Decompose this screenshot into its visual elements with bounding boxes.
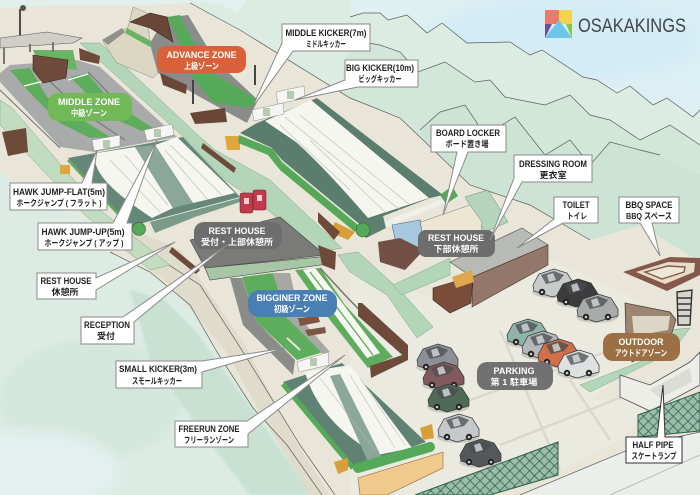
zone label: upper rest house: REST HOUSE [208,226,266,237]
parked cars [416,269,618,468]
bigginer ramp [230,268,398,375]
hawk jump landing [60,137,240,236]
brown fences between ramps [169,143,340,274]
callout: rest house: REST HOUSE [40,276,92,286]
callout: bbq space [619,197,679,256]
zone label: lower rest house [418,230,495,257]
callout: toilet: トイレ [567,211,587,221]
callout: half pipe: スケートランプ [632,451,677,461]
zone label: parking: 第 1 駐車場 [490,377,538,387]
green walkways [0,43,690,392]
callout: half pipe [626,385,682,463]
zone label: advance zone: 上級ゾーン [184,61,219,71]
zone label: advance zone: ADVANCE ZONE [166,50,236,61]
callout: half pipe: HALF PIPE [632,440,674,450]
callout: rest house: 休憩所 [52,287,79,297]
logo icon: coloured square [545,10,572,38]
half pipe ramp [620,352,700,411]
callout: bbq space: BBQ スペース [626,211,672,221]
callout: freerun zone [175,355,345,447]
zone label: bigginer zone: BIGGINER ZONE [256,293,328,304]
stairs [677,290,692,325]
callout: middle kicker: ミドルキッカー [306,39,346,49]
green chain link fences [415,392,700,495]
callout: dressing room: DRESSING ROOM [519,159,587,169]
callout: reception [81,245,227,344]
fence at beginner area [358,303,408,378]
zone label: bigginer zone [248,290,337,317]
zone label: lower rest house: REST HOUSE [428,233,484,244]
callout: board locker: BOARD LOCKER [436,128,500,138]
bbq space deck [623,257,700,291]
big kicker landing [238,98,445,240]
zone label: middle zone [48,93,132,121]
zone label: outdoor: アウトドアゾーン [615,348,667,358]
callout: bbq space: BBQ SPACE [626,200,672,210]
callout: reception: 受付 [97,331,116,341]
callout: dressing room [490,155,592,240]
callout: freerun zone: フリーランゾーン [184,435,234,445]
zone label: outdoor: OUTDOOR [618,337,664,348]
callout: hawk jump up: HAWK JUMP-UP(5m) [42,227,124,237]
zone label: parking: PARKING [494,366,534,377]
zone label: advance zone [157,46,246,73]
upper rest house roof [190,217,336,280]
callout: big kicker [295,60,418,100]
zone label: middle zone: MIDDLE ZONE [58,97,120,108]
callout: hawk jump up [38,140,157,250]
top left shelter and decks [0,5,100,156]
zone label: upper rest house [194,222,282,249]
red lift boxes [240,190,266,213]
outdoor area fence and deck [625,303,676,362]
logo: Osaka Kings: OSAKAKINGS [578,16,686,37]
callout: small kicker: SMALL KICKER(3m) [119,364,197,374]
kicker banners [92,86,329,372]
middle zone ramps [0,50,177,152]
callout: hawk jump flat: HAWK JUMP-FLAT(5m) [13,187,105,197]
callout: board locker: ボード置き場 [446,139,489,149]
callout: toilet [517,197,598,248]
zone label: parking [477,362,553,390]
road at bottom right [520,432,700,495]
lower rest house building [378,186,508,270]
callout: big kicker: BIG KICKER(10m) [346,63,414,73]
callout: hawk jump flat [10,150,107,210]
callout: hawk jump up: ホークジャンプ ( アップ ) [44,238,124,248]
callout: freerun zone: FREERUN ZONE [178,424,240,434]
zone label: middle zone: 中級ゾーン [71,108,107,118]
callout: small kicker [116,348,285,388]
advance zone ramp [102,7,258,150]
callout: reception: RECEPTION [84,320,130,330]
callout: small kicker: スモールキッカー [132,376,182,386]
callout: middle kicker: MIDDLE KICKER(7m) [286,28,366,38]
callout: hawk jump flat: ホークジャンプ ( フラット ) [16,198,102,208]
dressing room and toilet building [433,228,548,313]
zone label: bigginer zone: 初級ゾーン [274,304,310,314]
callout: middle kicker [252,24,370,108]
logo: Osaka Kings [545,10,686,38]
callout: board locker [431,125,506,215]
callout: toilet: TOILET [562,200,590,210]
callout: rest house [37,242,175,299]
lower freerun landing [283,363,443,495]
callout: dressing room: 更衣室 [540,170,567,180]
zone label: lower rest house: 下部休憩所 [434,244,479,254]
zone label: outdoor [603,333,680,361]
callout: big kicker: ビッグキッカー [358,74,402,84]
zone label: upper rest house: 受付・上部休憩所 [201,237,274,247]
